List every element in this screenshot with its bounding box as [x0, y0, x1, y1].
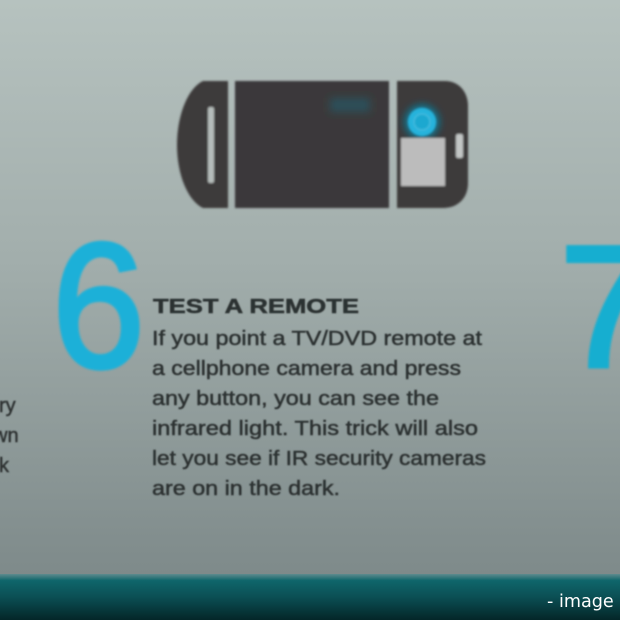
side button — [456, 134, 463, 158]
camera lens — [408, 108, 436, 136]
body line 2: a cellphone camera and press — [152, 357, 461, 380]
screen tint — [330, 98, 370, 112]
phone screen — [235, 81, 389, 208]
lens centre — [414, 114, 430, 130]
phone right end — [397, 81, 468, 208]
phone left end — [177, 81, 228, 208]
text block: test a remote — [152, 296, 486, 500]
body line 5: let you see if IR security cameras — [152, 447, 486, 470]
camera flash panel — [401, 138, 445, 186]
icon: cellphone camera — [177, 81, 468, 208]
number 6: 6 — [52, 206, 145, 405]
camera lens glow — [405, 105, 439, 139]
phone speaker slot — [208, 107, 214, 183]
body line 1: If you point a TV/DVD remote at — [152, 327, 482, 350]
body line 4: infrared light. This trick will also — [152, 417, 478, 440]
body line 3: any button, you can see the — [152, 387, 439, 410]
footer caption: - image — [547, 592, 614, 612]
left column text fragment — [0, 395, 19, 477]
heading: TEST A REMOTE — [153, 296, 359, 318]
footer band — [0, 574, 620, 620]
body line 6: are on in the dark. — [152, 477, 340, 500]
